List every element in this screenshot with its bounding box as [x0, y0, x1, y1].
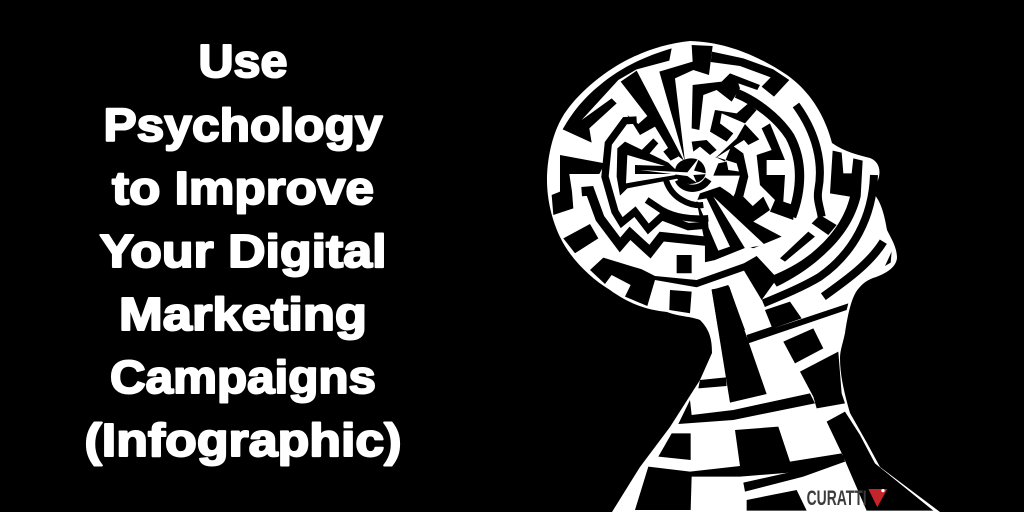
title: Psychology: [104, 99, 383, 151]
long outer right arc: [796, 105, 822, 217]
bottom block: [747, 490, 807, 511]
brow arc: [763, 175, 874, 303]
bottom blocks: [669, 290, 692, 313]
lower block with band: [635, 427, 845, 510]
logo triangle: [868, 489, 887, 507]
upper left wedge: [621, 71, 684, 161]
long inner right arc: [737, 93, 800, 217]
thin lower band: [743, 455, 845, 492]
lower right rings: [678, 179, 708, 188]
white triangle core: [626, 155, 682, 183]
outer left arc, hook and block: [563, 48, 672, 143]
inner zig band: [605, 120, 708, 229]
block joining arc: [812, 215, 837, 235]
title: Campaigns: [110, 351, 376, 403]
logo dot: [881, 489, 885, 492]
bottom tab: [677, 255, 692, 273]
maze: temple, forehead and face arcs: [763, 151, 892, 303]
white rays: [697, 198, 730, 251]
illustration: maze head silhouette: [547, 41, 940, 512]
neck wedge: [712, 287, 767, 403]
title: [84, 35, 402, 466]
title: to Improve: [112, 162, 374, 214]
lower left block: [563, 224, 598, 253]
ring above centre: [692, 140, 717, 155]
inner H bars: [713, 162, 740, 176]
top crown wedge with tab: [659, 45, 713, 162]
title: Marketing: [119, 288, 367, 340]
neck block: [783, 328, 823, 363]
lower ring with tabs: [590, 256, 777, 306]
maze: crown and brain section: [552, 45, 837, 330]
nose arc: [823, 242, 883, 297]
curved band: [678, 393, 815, 424]
lower right zig and wedge: [697, 187, 782, 262]
forehead block and arc: [770, 151, 863, 287]
chin notch: [885, 252, 892, 266]
top spoke with S foot: [692, 73, 760, 130]
shoulder wedge: [827, 412, 933, 511]
left outer block: [552, 155, 605, 215]
logo wordmark: CURATTI: [807, 486, 867, 510]
centre burst: [675, 158, 706, 184]
title: Your Digital: [100, 225, 386, 277]
maze: neck: [635, 287, 933, 511]
left tabs near centre: [642, 138, 658, 155]
left block: [658, 433, 691, 460]
inner ring right zigzag: [715, 145, 757, 217]
diagonal ray right of centre: [715, 124, 759, 158]
thin bar: [698, 377, 727, 388]
arrow triangle around white core: [617, 142, 684, 196]
slot bar lower right: [780, 232, 815, 262]
head silhouette: [547, 41, 940, 512]
title: Use: [198, 35, 288, 87]
upper right S shape: [710, 103, 757, 142]
neck arc with block: [747, 302, 848, 343]
right side block: [800, 352, 845, 408]
logo: [807, 486, 887, 510]
title: (Infographic): [84, 414, 402, 466]
E-shape: [757, 123, 793, 220]
outer zig band: [582, 191, 710, 252]
crown outer arc: [711, 52, 789, 97]
